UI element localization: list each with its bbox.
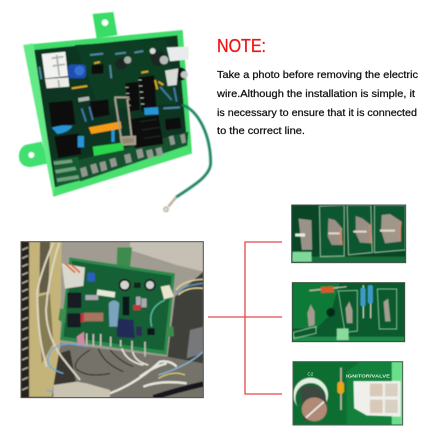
white connector <box>353 381 401 417</box>
C2 label: C2 <box>307 371 314 376</box>
capacitors <box>119 280 155 290</box>
circuit board <box>34 35 187 187</box>
PCB <box>60 257 175 355</box>
detail photo 3: capacitor and ignitor/valve connector <box>293 362 403 425</box>
dark housing right <box>167 272 203 363</box>
TO-220 regulator <box>165 68 178 86</box>
orange-grey block <box>84 313 103 321</box>
striped conduit <box>21 242 29 398</box>
IGNITOR/VALVE label: IGNITOR/VALVE <box>346 374 390 379</box>
terminals <box>87 333 145 357</box>
diode <box>309 287 347 291</box>
wall <box>60 242 203 363</box>
green jumper block <box>93 143 124 156</box>
connector and orange wires <box>62 263 85 289</box>
detail photo 1: terminals <box>292 205 406 263</box>
installed board photo <box>21 242 203 398</box>
teal wire <box>151 300 165 327</box>
fuse <box>114 97 135 145</box>
insulation <box>29 242 62 397</box>
heading: NOTE: <box>217 36 266 56</box>
electrolytic capacitors <box>115 48 188 81</box>
green ground wire <box>164 105 211 211</box>
detail photo 2: diode and resistors <box>292 283 405 342</box>
resistors <box>363 285 371 318</box>
axial diode <box>339 366 343 411</box>
white label <box>97 289 115 298</box>
product photo: control board with green housing <box>19 12 211 211</box>
note text: to the correct line. <box>217 126 305 137</box>
blue capacitors <box>52 107 159 147</box>
misc components <box>85 295 147 307</box>
white connector right <box>161 285 174 299</box>
capacitor <box>300 385 328 421</box>
screw terminals <box>80 134 186 177</box>
note text <box>216 70 418 137</box>
orange capacitor <box>89 121 122 134</box>
blue trimmer <box>87 273 95 282</box>
integrated circuits <box>90 64 181 130</box>
fuse <box>109 300 119 327</box>
mounting tab top <box>93 12 117 38</box>
pin rows <box>125 80 144 105</box>
mounting ear <box>58 308 174 337</box>
white connector left <box>42 52 69 88</box>
blue potentiometer <box>68 64 86 78</box>
capacitor small and resistors <box>39 51 180 122</box>
mounting tab left <box>19 142 48 167</box>
terminal blades <box>295 214 402 250</box>
note text: Take a photo before removing the electric <box>217 70 418 81</box>
silk-screen text block <box>53 159 79 182</box>
note text: is necessary to ensure that it is connected <box>217 108 417 119</box>
bottom cable bundle <box>53 382 110 398</box>
red parts <box>81 305 141 322</box>
relays <box>67 293 155 338</box>
wires <box>37 243 203 398</box>
board tab <box>117 247 132 267</box>
white connector right <box>167 47 189 61</box>
green housing <box>23 30 192 197</box>
relays <box>49 101 163 158</box>
red connector lines <box>208 242 282 394</box>
note text: wire.Although the installation is simple, it <box>216 89 415 100</box>
terminal blades <box>307 304 315 327</box>
lower cavity <box>53 343 203 398</box>
